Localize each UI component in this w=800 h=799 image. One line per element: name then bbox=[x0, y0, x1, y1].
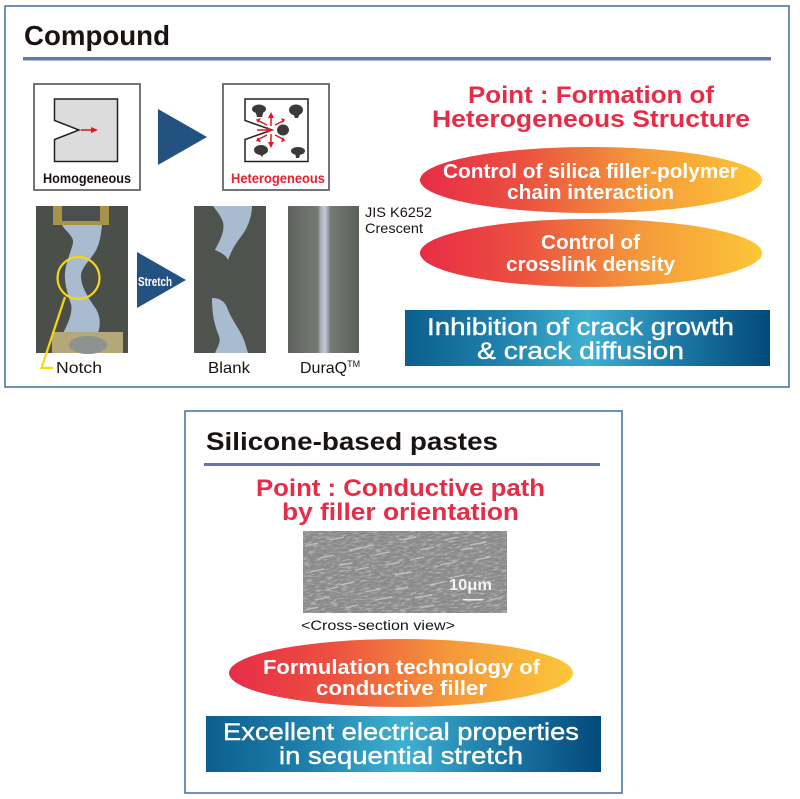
callout: notch leader bbox=[42, 297, 65, 368]
panel: silicone-based pastes bbox=[185, 411, 622, 793]
banner: excellent electrical properties: in sequential stretch bbox=[279, 743, 523, 770]
photo: DuraQ specimen bbox=[288, 206, 359, 353]
diagram: homogeneous: Homogeneous bbox=[43, 170, 131, 186]
caption: cross-section view: <Cross-section view> bbox=[301, 617, 455, 633]
diagram: homogeneous bbox=[34, 84, 140, 190]
ellipse: crosslink density: crosslink density bbox=[506, 254, 676, 276]
label: Blank: Blank bbox=[208, 360, 251, 377]
diagram: heterogeneous: Heterogeneous bbox=[231, 170, 325, 186]
scale label: 10μm bbox=[449, 577, 492, 594]
banner: inhibition of crack growth: Inhibition of crack growth bbox=[427, 314, 734, 341]
ellipse: formulation technology: conductive filler bbox=[316, 678, 487, 700]
ellipse: crosslink density: Control of bbox=[541, 232, 640, 254]
label: Notch: Notch bbox=[56, 360, 102, 377]
arrow: stretch bbox=[137, 252, 186, 308]
banner: inhibition of crack growth bbox=[405, 310, 770, 366]
photo: blank specimen bbox=[194, 206, 266, 353]
ellipse: silica filler-polymer bbox=[420, 147, 762, 213]
heading: point formation of heterogeneous structure bbox=[432, 82, 750, 133]
heading: point conductive path: Point : Conductive path bbox=[256, 475, 545, 502]
scale bar bbox=[463, 599, 483, 600]
label: DuraQ TM: TM bbox=[347, 359, 360, 369]
heading: point conductive path: by filler orientation bbox=[282, 499, 519, 526]
heading: point formation of heterogeneous structure: Point : Formation of bbox=[468, 82, 715, 109]
ellipse: silica filler-polymer: Control of silica filler-polymer bbox=[443, 161, 738, 183]
heading rule bbox=[204, 463, 600, 466]
photo: notch specimen bbox=[36, 206, 128, 354]
arrow: homogeneous to heterogeneous bbox=[158, 109, 207, 165]
label: DuraQ TM: DuraQ bbox=[300, 360, 347, 377]
banner: inhibition of crack growth: & crack diffusion bbox=[477, 338, 684, 365]
heading rule bbox=[23, 57, 771, 60]
banner: excellent electrical properties bbox=[206, 716, 601, 772]
diagram: heterogeneous bbox=[223, 84, 329, 190]
banner: excellent electrical properties: Excellent electrical properties bbox=[223, 719, 579, 746]
ellipse: crosslink density bbox=[420, 219, 762, 287]
micrograph: cross-section bbox=[303, 531, 507, 613]
label: JIS K6252 Crescent: JIS K6252 bbox=[365, 204, 432, 220]
ellipse: formulation technology bbox=[229, 639, 573, 707]
arrow: stretch: Stretch bbox=[138, 275, 172, 289]
heading: silicone-based pastes: Silicone-based pastes bbox=[206, 428, 498, 456]
panel: compound bbox=[5, 6, 789, 387]
ellipse: silica filler-polymer: chain interaction bbox=[507, 182, 674, 204]
heading: Compound: Compound bbox=[24, 20, 170, 51]
heading: point formation of heterogeneous structure: Heterogeneous Structure bbox=[432, 106, 750, 133]
label: JIS K6252 Crescent: Crescent bbox=[365, 220, 423, 236]
heading: point conductive path bbox=[256, 475, 545, 526]
ellipse: formulation technology: Formulation technology of bbox=[263, 657, 540, 679]
label: JIS K6252 Crescent bbox=[365, 204, 432, 236]
